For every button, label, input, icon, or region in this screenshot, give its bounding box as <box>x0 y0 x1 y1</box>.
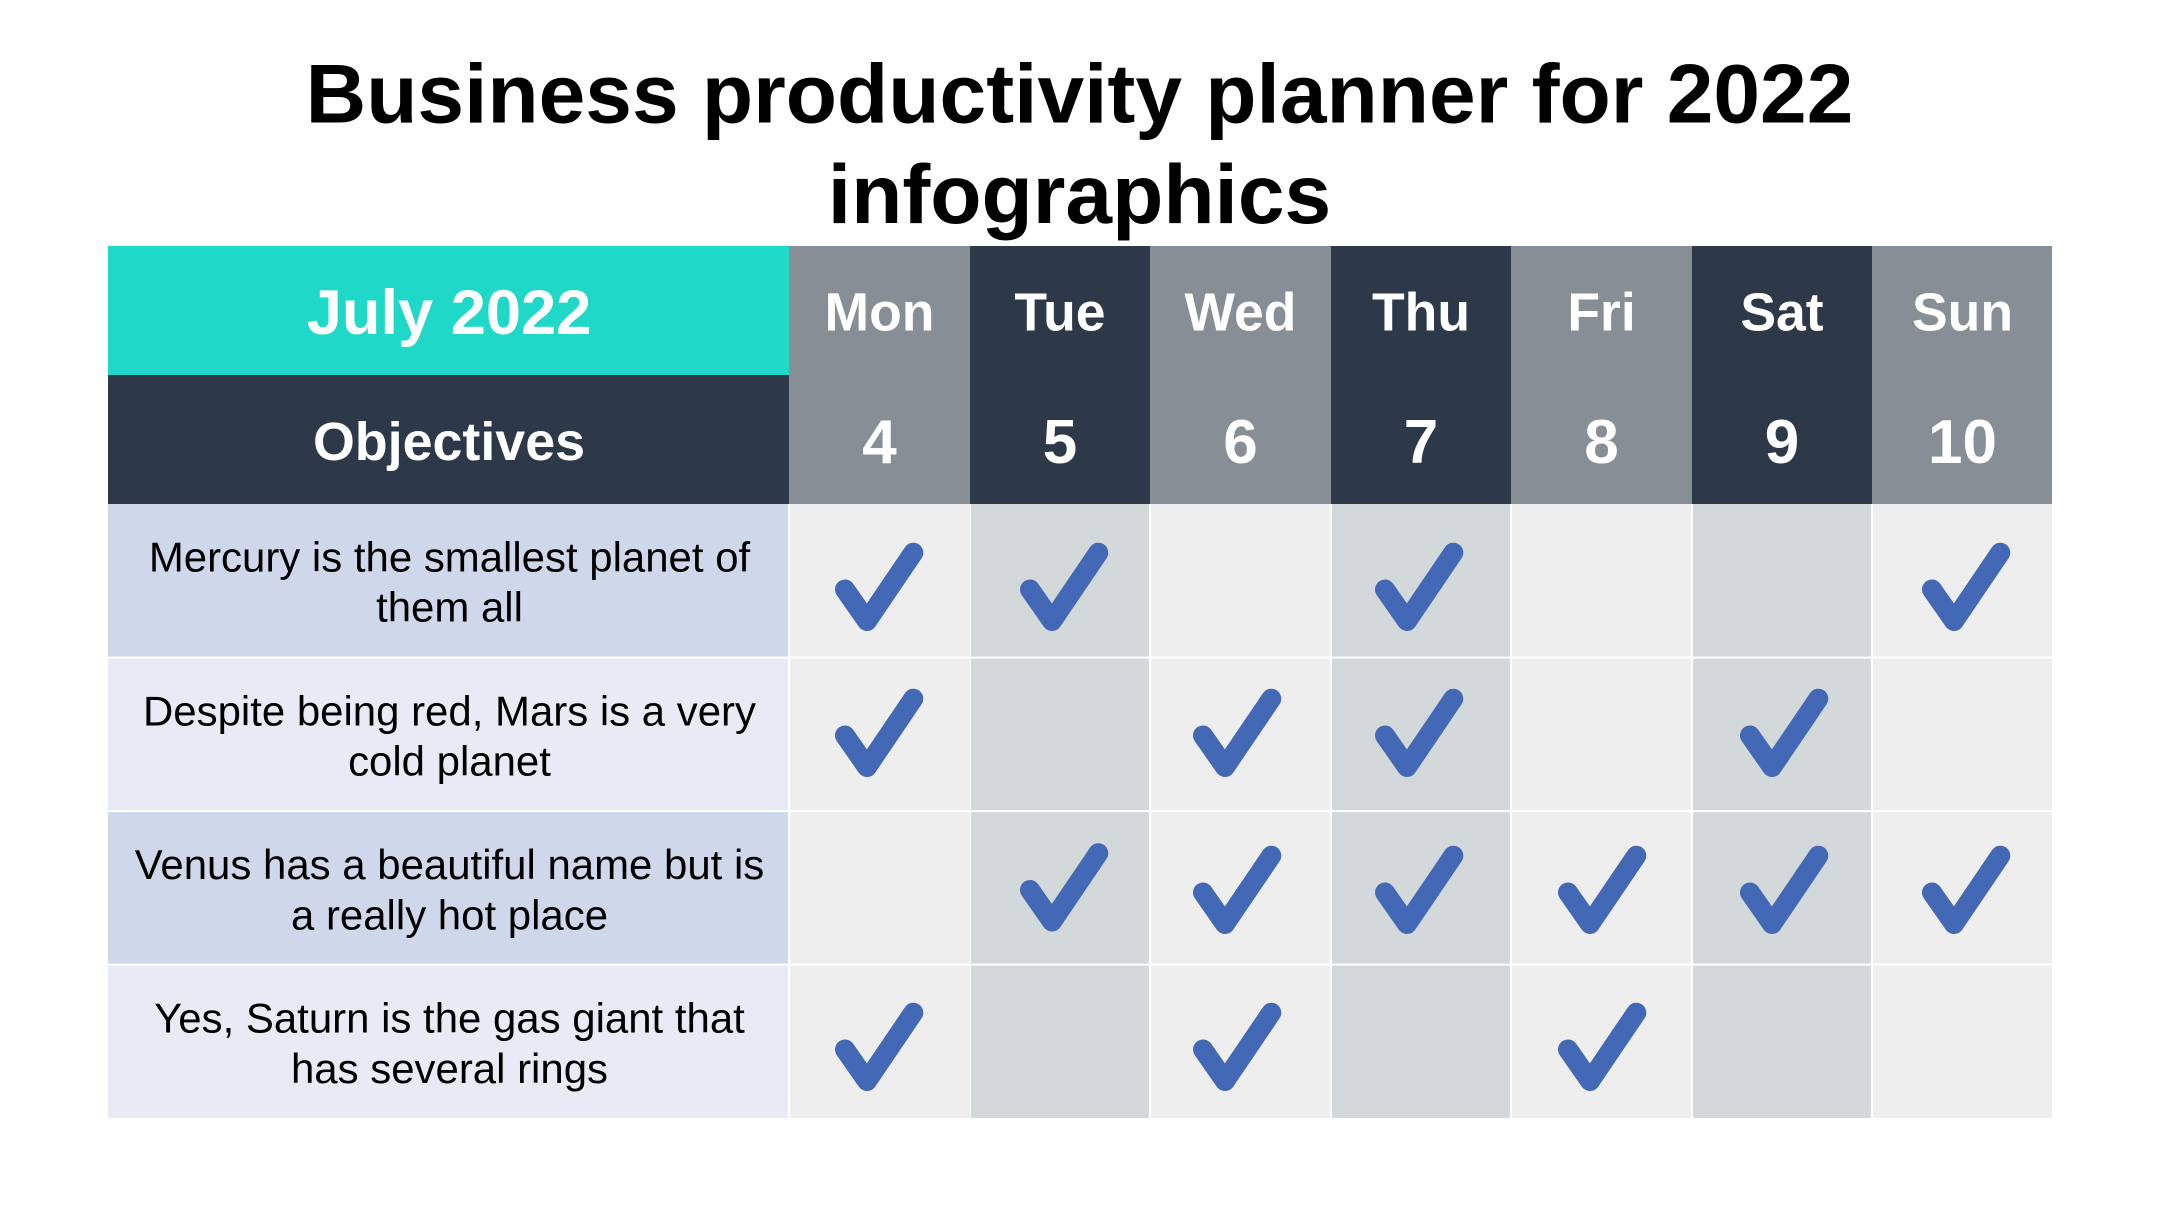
header: Saturday 9: Sat <box>1740 284 1824 342</box>
objective row 1 <box>108 504 788 657</box>
header: Monday 4: Mon <box>825 284 934 342</box>
header: Thursday 7: 7 <box>1404 408 1438 477</box>
panel: objectives heading <box>108 375 789 504</box>
header: Sunday 10: Sun <box>1912 284 2013 342</box>
objective row 2 <box>108 659 788 810</box>
header: Thursday 7: Thu <box>1372 284 1470 342</box>
title: infographics <box>828 147 1331 241</box>
grid cell backgrounds <box>790 504 2052 1118</box>
header: Wednesday 6 <box>1150 246 1331 504</box>
header: Friday 8: Fri <box>1567 284 1636 342</box>
header: Wednesday 6: Wed <box>1185 284 1296 342</box>
objective row 4: Yes, Saturn is the gas giant that <box>154 994 745 1041</box>
objective row 1: Mercury is the smallest planet of <box>149 534 751 580</box>
icons: row 1 check marks <box>845 553 2000 621</box>
objective row 3: a really hot place <box>291 892 608 939</box>
panel: month heading: July 2022 <box>307 278 591 348</box>
objective row 3 <box>108 812 788 964</box>
icons: row 4 check marks <box>845 1013 1636 1081</box>
header: Tuesday 5 <box>970 246 1150 504</box>
header: Monday 4: 4 <box>862 408 897 477</box>
panel: objectives heading: Objectives <box>313 412 585 472</box>
header: Tuesday 5: 5 <box>1043 408 1077 477</box>
objective row 4: has several rings <box>291 1045 608 1092</box>
header: Friday 8 <box>1511 246 1692 504</box>
panel: month heading <box>108 246 789 375</box>
header: Saturday 9 <box>1692 246 1872 504</box>
icons: row 2 check marks <box>845 699 1818 767</box>
header: Saturday 9: 9 <box>1765 408 1799 477</box>
header: Wednesday 6: 6 <box>1223 408 1258 477</box>
objective row 2: cold planet <box>348 738 551 785</box>
header: Tuesday 5: Tue <box>1014 284 1106 342</box>
objective row 1: them all <box>376 584 523 631</box>
icons: row 3 check marks <box>1030 853 2000 924</box>
title <box>306 46 1853 241</box>
header: Sunday 10 <box>1872 246 2052 504</box>
objective row 3: Venus has a beautiful name but is <box>135 841 764 888</box>
header: Monday 4 <box>789 246 970 504</box>
title: Business productivity planner for 2022 <box>306 46 1853 140</box>
header: Thursday 7 <box>1331 246 1511 504</box>
header: Sunday 10: 10 <box>1928 408 1997 477</box>
header: Friday 8: 8 <box>1584 408 1619 477</box>
objective row 4 <box>108 966 788 1118</box>
objective row 2: Despite being red, Mars is a very <box>143 688 756 734</box>
